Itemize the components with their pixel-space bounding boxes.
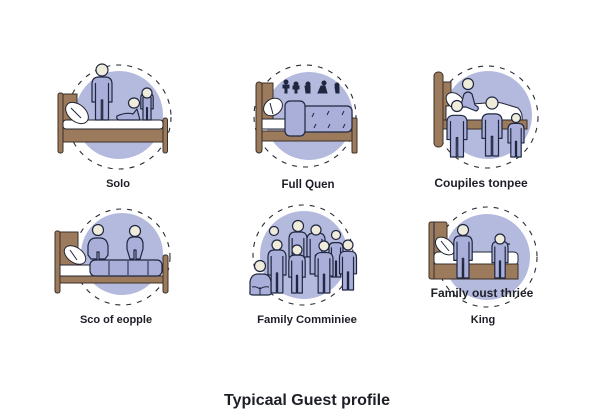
icon: bed with blanket: [55, 231, 168, 293]
label: solo: Solo: [106, 178, 130, 190]
panel: two seated people: [55, 209, 170, 326]
icon: standing adult: [92, 64, 112, 120]
panel: family: [250, 205, 357, 326]
icon: seated adult right: [127, 226, 143, 259]
icon: solo bed: [58, 93, 168, 153]
icon: left adult: [447, 100, 467, 157]
label: overlay caption: Family oust thriee: [431, 286, 534, 300]
icon: back row figures: [270, 220, 343, 277]
icon: middle adult: [482, 97, 502, 156]
icon: seated figure: [250, 260, 271, 295]
label: family: Family Comminiee: [257, 314, 357, 326]
panel: full queen: [254, 65, 357, 191]
icon: front row figures: [268, 240, 356, 293]
icon: king bed: [429, 222, 518, 279]
label: couples: Coupiles tonpee: [434, 176, 528, 190]
label: seated people: Sco of eopple: [80, 314, 152, 326]
icon: child: [508, 114, 524, 157]
icon: seated adult left: [88, 224, 108, 259]
icon: queen bed: [256, 82, 357, 153]
icon: seated adult: [461, 78, 478, 111]
icon: blanket: [285, 101, 352, 136]
icon: small child: [141, 88, 153, 120]
label: full queen: Full Quen: [281, 179, 335, 191]
icon: small figures row: [283, 80, 339, 93]
panel: solo: [58, 64, 171, 190]
panel: king: [429, 207, 537, 326]
title: Typicaal Guest profile: [224, 392, 390, 409]
icon: child with arm out: [492, 234, 510, 278]
label: king: King: [471, 314, 495, 326]
icon: seated person: [117, 98, 140, 120]
icon: couples bed: [434, 72, 527, 147]
panel: couples: [434, 66, 538, 190]
icon: adult: [454, 224, 472, 278]
